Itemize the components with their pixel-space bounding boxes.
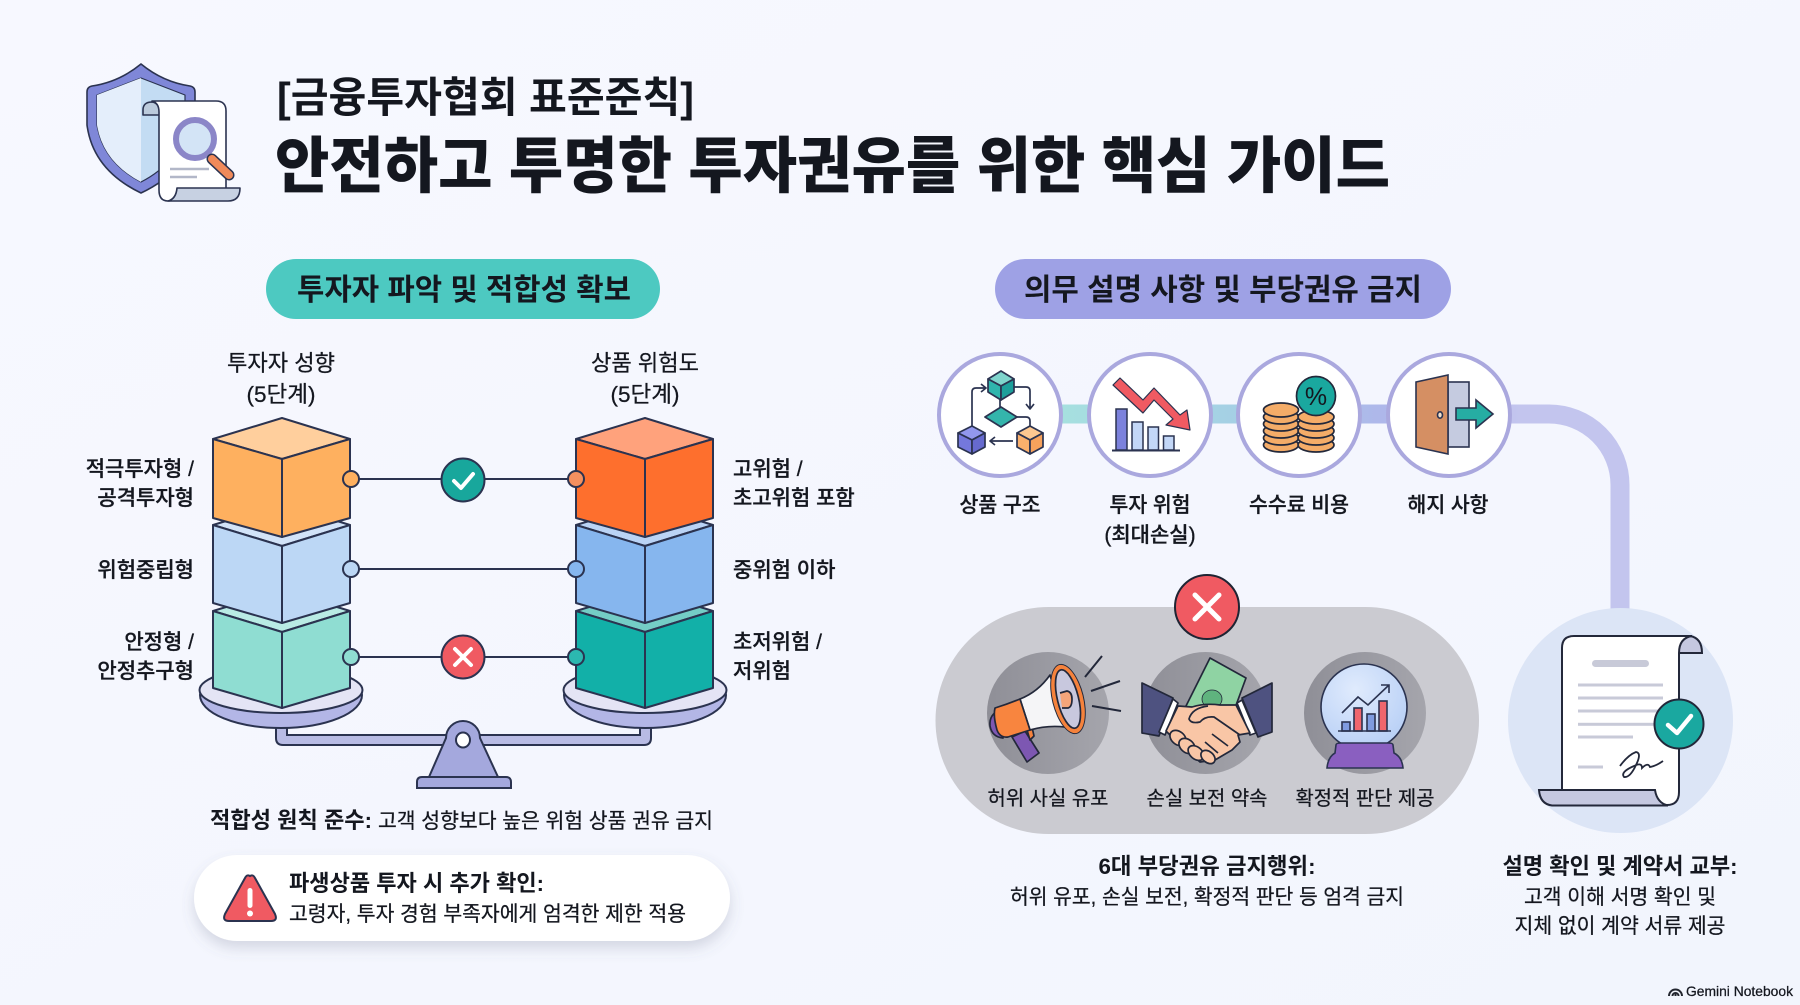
prohibited act labels <box>988 787 1434 810</box>
heading pill: right section <box>995 259 1451 319</box>
icon: suitable check <box>442 458 484 502</box>
icon: signed contract document <box>1508 608 1733 833</box>
icon circle: cancellation terms <box>1388 354 1510 476</box>
balance scale <box>200 662 726 788</box>
icon circle: fees and costs: % <box>1305 383 1327 411</box>
icon: handshake with cash <box>1142 652 1272 774</box>
product risk labels: 초고위험 포함 <box>733 487 855 510</box>
text: explanation confirmation and contract delivery: 고객 이해 서명 확인 및 <box>1524 886 1716 909</box>
prohibited act labels: 허위 사실 유포 <box>988 787 1108 810</box>
disclosure item labels: 수수료 비용 <box>1249 494 1349 517</box>
callout: derivatives warning <box>194 855 730 941</box>
suitability principle text: 고객 성향보다 높은 위험 상품 권유 금지 <box>378 810 713 833</box>
right cube stack <box>576 418 713 708</box>
icon: shield and document with magnifier <box>87 64 240 201</box>
left cube stack <box>213 418 350 708</box>
disclosure item labels: 상품 구조 <box>960 494 1040 517</box>
heading pill: right section: 의무 설명 사항 및 부당권유 금지 <box>1024 274 1422 307</box>
icon: unsuitable cross <box>442 636 484 678</box>
heading pill: left section: 투자자 파악 및 적합성 확보 <box>297 274 631 307</box>
icon circle: fees and costs <box>1238 354 1360 476</box>
callout heading: 파생상품 투자 시 추가 확인: <box>289 871 544 896</box>
text: six prohibited practices: 6대 부당권유 금지행위: <box>1098 854 1316 879</box>
watermark: Gemini Notebook: Gemini Notebook <box>1686 983 1794 999</box>
investor type labels: 위험중립형 <box>97 559 194 582</box>
text: explanation confirmation and contract delivery <box>1502 854 1738 938</box>
column heading: product risk: (5단계) <box>611 382 679 407</box>
investor type labels: 안정추구형 <box>97 660 194 683</box>
icon: prohibited cross <box>1175 575 1239 639</box>
main title: 안전하고 투명한 투자권유를 위한 핵심 가이드 <box>275 132 1390 200</box>
disclosure item labels <box>960 494 1488 547</box>
prohibited act labels: 확정적 판단 제공 <box>1296 787 1434 810</box>
investor type labels: 적극투자형 / <box>86 458 194 481</box>
disclosure item labels: 해지 사항 <box>1408 494 1488 517</box>
panel: prohibited acts <box>936 575 1479 834</box>
heading pill: left section <box>266 259 660 319</box>
text: six prohibited practices: 허위 유포, 손실 보전, 확정적 판단 등 엄격 금지 <box>1010 886 1404 909</box>
suitability connector lines <box>343 471 584 665</box>
icon circle: investment risk <box>1089 354 1211 476</box>
icon: megaphone <box>987 652 1121 774</box>
column heading: investor profile: (5단계) <box>247 382 315 407</box>
product risk labels: 초저위험 / <box>733 631 822 654</box>
investor type labels: 안정형 / <box>124 631 194 654</box>
suitability principle text: 적합성 원칙 준수: <box>210 808 372 833</box>
text: explanation confirmation and contract delivery: 지체 없이 계약 서류 제공 <box>1514 915 1726 938</box>
icon: warning triangle <box>224 875 276 921</box>
callout body: 고령자, 투자 경험 부족자에게 엄격한 제한 적용 <box>289 903 686 926</box>
product risk labels: 고위험 / <box>733 458 803 481</box>
subtitle: [금융투자협회 표준준칙] <box>277 74 694 121</box>
prohibited act labels: 손실 보전 약속 <box>1146 787 1268 810</box>
disclosure item labels: 투자 위험 <box>1110 494 1190 517</box>
arrow: process connector band <box>1060 414 1620 615</box>
product risk labels <box>733 458 855 683</box>
product risk labels: 저위험 <box>733 660 791 683</box>
title block <box>275 74 1390 200</box>
suitability principle text <box>210 808 713 833</box>
text: six prohibited practices <box>1010 854 1404 909</box>
icon: crystal ball with chart <box>1304 652 1426 774</box>
investor type labels <box>86 458 194 683</box>
column heading: product risk: 상품 위험도 <box>591 351 699 376</box>
column heading: investor profile: 투자자 성향 <box>227 351 335 376</box>
column heading: product risk <box>591 351 699 407</box>
icon circle: product structure <box>939 354 1061 476</box>
column heading: investor profile <box>227 351 335 407</box>
product risk labels: 중위험 이하 <box>733 559 835 582</box>
disclosure item labels: (최대손실) <box>1104 524 1196 547</box>
investor type labels: 공격투자형 <box>97 487 194 510</box>
text: explanation confirmation and contract delivery: 설명 확인 및 계약서 교부: <box>1502 854 1738 879</box>
